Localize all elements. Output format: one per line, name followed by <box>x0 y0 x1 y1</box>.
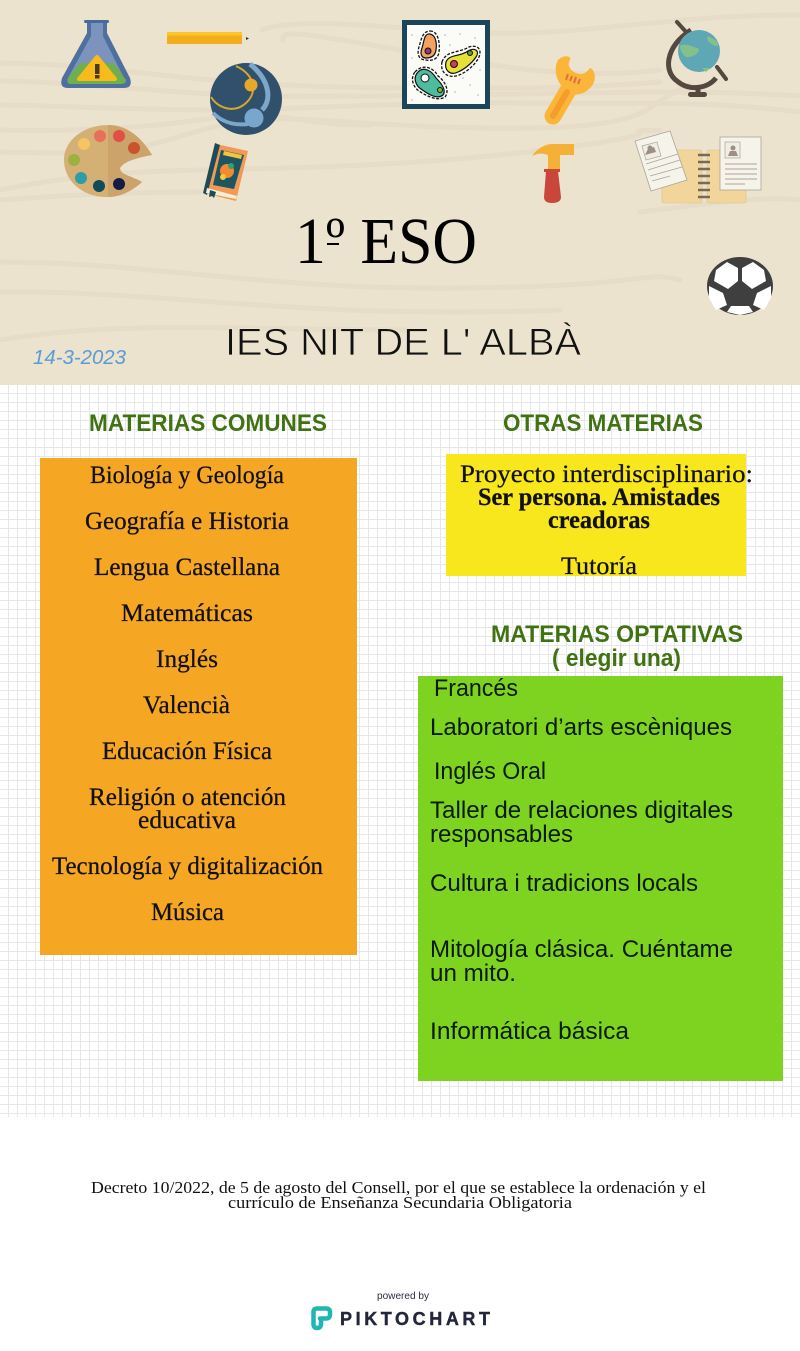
panel: materias optativas: Inglés Oral <box>434 758 546 785</box>
panel: materias optativas: un mito. <box>430 960 516 987</box>
panel: otras materias: Ser persona. Amistades <box>478 484 720 511</box>
powered by Piktochart logo: powered by <box>377 1291 429 1302</box>
icon: paint palette <box>64 125 152 197</box>
panel: materias optativas: Francés <box>434 675 518 702</box>
heading: otras materias: OTRAS MATERIAS <box>503 410 703 437</box>
icon: wrench <box>553 56 595 116</box>
panel: materias comunes: Religión o atención <box>89 784 286 811</box>
heading: materias optativas: MATERIAS OPTATIVAS <box>491 621 743 648</box>
heading: materias comunes: MATERIAS COMUNES <box>89 410 327 437</box>
header background <box>0 0 800 385</box>
panel: materias optativas: responsables <box>430 821 573 848</box>
decree note <box>91 1178 706 1212</box>
panel: otras materias: creadoras <box>548 507 650 534</box>
icon: book <box>203 143 248 201</box>
panel: otras materias <box>446 454 753 580</box>
title: 1º ESO <box>295 205 477 278</box>
icon: flask with warning <box>61 20 131 88</box>
icon: hammer <box>532 144 574 203</box>
panel: materias comunes: Geografía e Historia <box>85 508 289 535</box>
school name: IES NIT DE L' ALBÀ <box>225 321 582 364</box>
icon: soccer ball <box>707 257 773 315</box>
icon: bacteria picture <box>402 20 490 109</box>
panel: materias comunes: Biología y Geología <box>90 462 284 489</box>
panel: materias optativas: Laboratori d’arts escèniques <box>430 714 732 741</box>
panel: materias comunes: Matemáticas <box>121 600 253 627</box>
panel: materias comunes: Tecnología y digitalización <box>52 853 323 880</box>
panel: materias comunes <box>40 458 357 955</box>
panel: materias comunes: Inglés <box>156 646 218 673</box>
panel: materias optativas: Mitología clásica. Cuéntame <box>430 936 733 963</box>
panel: otras materias: Tutoría <box>561 553 637 580</box>
icon: globe <box>669 22 726 97</box>
panel: materias comunes: Educación Física <box>102 738 272 765</box>
panel: materias optativas: Cultura i tradicions locals <box>430 870 698 897</box>
panel: materias comunes: Valencià <box>143 692 230 719</box>
powered by Piktochart logo: PIKTOCHART <box>340 1309 490 1329</box>
decree note: Decreto 10/2022, de 5 de agosto del Consell, por el que se establece la ordenación y el <box>91 1178 706 1197</box>
date: 14-3-2023 <box>33 347 126 369</box>
panel: materias optativas: Informática básica <box>430 1018 630 1045</box>
decree note: currículo de Enseñanza Secundaria Obligatoria <box>228 1193 573 1212</box>
panel: otras materias: Proyecto interdisciplinario: <box>460 461 753 488</box>
panel: materias comunes: Lengua Castellana <box>94 554 280 581</box>
heading: materias optativas: ( elegir una) <box>552 645 681 672</box>
panel: materias optativas <box>418 675 783 1081</box>
icon: notebook with CVs <box>635 131 761 203</box>
icon: pencil <box>167 32 249 44</box>
panel: materias optativas: Taller de relaciones digitales <box>430 797 733 824</box>
panel: materias comunes: educativa <box>138 807 236 834</box>
powered by Piktochart logo <box>314 1291 490 1329</box>
panel: materias comunes: Música <box>151 899 224 926</box>
icon: planets <box>210 63 282 135</box>
heading: materias optativas <box>491 621 743 672</box>
